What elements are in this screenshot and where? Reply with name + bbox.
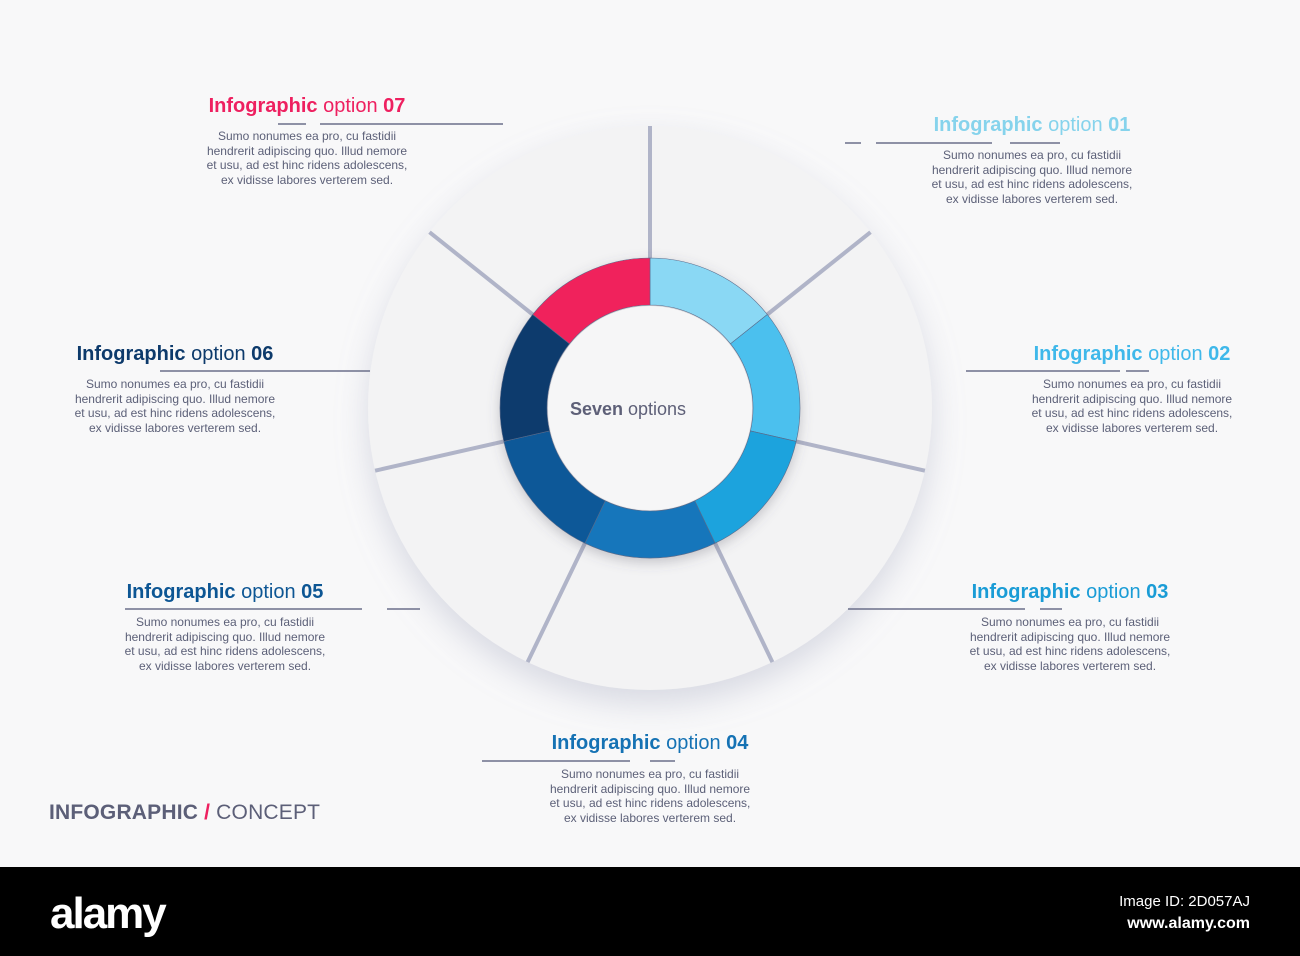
- option 05: [125, 581, 420, 673]
- option 02: [966, 343, 1232, 435]
- option 04: et usu, ad est hinc ridens adolescens,: [550, 796, 750, 810]
- footer bar: Image ID: 2D057AJ: [1119, 893, 1250, 910]
- option 06: Infographic option 06: [77, 343, 273, 365]
- option 02: et usu, ad est hinc ridens adolescens,: [1032, 406, 1232, 420]
- option 03: Sumo nonumes ea pro, cu fastidii: [981, 615, 1159, 629]
- option 02: hendrerit adipiscing quo. Illud nemore: [1032, 392, 1232, 406]
- center circle: [548, 306, 752, 510]
- center label: Seven options: [570, 399, 686, 419]
- option 04: Sumo nonumes ea pro, cu fastidii: [561, 767, 739, 781]
- option 03: hendrerit adipiscing quo. Illud nemore: [970, 630, 1170, 644]
- option 05: et usu, ad est hinc ridens adolescens,: [125, 644, 325, 658]
- option 04: Infographic option 04: [552, 732, 749, 754]
- footer bar: alamy: [50, 889, 167, 938]
- option 02: ex vidisse labores verterem sed.: [1046, 421, 1218, 435]
- option 07: hendrerit adipiscing quo. Illud nemore: [207, 144, 407, 158]
- option 06: ex vidisse labores verterem sed.: [89, 421, 261, 435]
- footer bar: [0, 867, 1300, 956]
- option 07: ex vidisse labores verterem sed.: [221, 173, 393, 187]
- option 06: hendrerit adipiscing quo. Illud nemore: [75, 392, 275, 406]
- option 05: hendrerit adipiscing quo. Illud nemore: [125, 630, 325, 644]
- option 06: [75, 343, 370, 435]
- option 04: ex vidisse labores verterem sed.: [564, 811, 736, 825]
- option 02: Sumo nonumes ea pro, cu fastidii: [1043, 377, 1221, 391]
- option 07: et usu, ad est hinc ridens adolescens,: [207, 158, 407, 172]
- option 01: [845, 114, 1132, 206]
- option 05: ex vidisse labores verterem sed.: [139, 659, 311, 673]
- option 01: Sumo nonumes ea pro, cu fastidii: [943, 148, 1121, 162]
- option 03: [848, 581, 1170, 673]
- ring chart: [500, 258, 800, 558]
- spokes: [375, 126, 925, 662]
- option 02: Infographic option 02: [1034, 343, 1230, 365]
- outer disc: [368, 126, 932, 690]
- option 06: et usu, ad est hinc ridens adolescens,: [75, 406, 275, 420]
- option 06: Sumo nonumes ea pro, cu fastidii: [86, 377, 264, 391]
- option 04: [482, 732, 750, 825]
- option 07: Sumo nonumes ea pro, cu fastidii: [218, 129, 396, 143]
- option 01: ex vidisse labores verterem sed.: [946, 192, 1118, 206]
- option 07: [207, 95, 503, 187]
- brand: infographic concept: INFOGRAPHIC / CONCEPT: [49, 801, 320, 824]
- option 01: Infographic option 01: [934, 114, 1130, 136]
- option 07: Infographic option 07: [209, 95, 405, 117]
- option 05: Infographic option 05: [127, 581, 323, 603]
- option 05: Sumo nonumes ea pro, cu fastidii: [136, 615, 314, 629]
- footer bar: www.alamy.com: [1126, 915, 1250, 932]
- option 03: et usu, ad est hinc ridens adolescens,: [970, 644, 1170, 658]
- option 03: ex vidisse labores verterem sed.: [984, 659, 1156, 673]
- option 01: hendrerit adipiscing quo. Illud nemore: [932, 163, 1132, 177]
- option 04: hendrerit adipiscing quo. Illud nemore: [550, 782, 750, 796]
- option 01: et usu, ad est hinc ridens adolescens,: [932, 177, 1132, 191]
- option 03: Infographic option 03: [972, 581, 1168, 603]
